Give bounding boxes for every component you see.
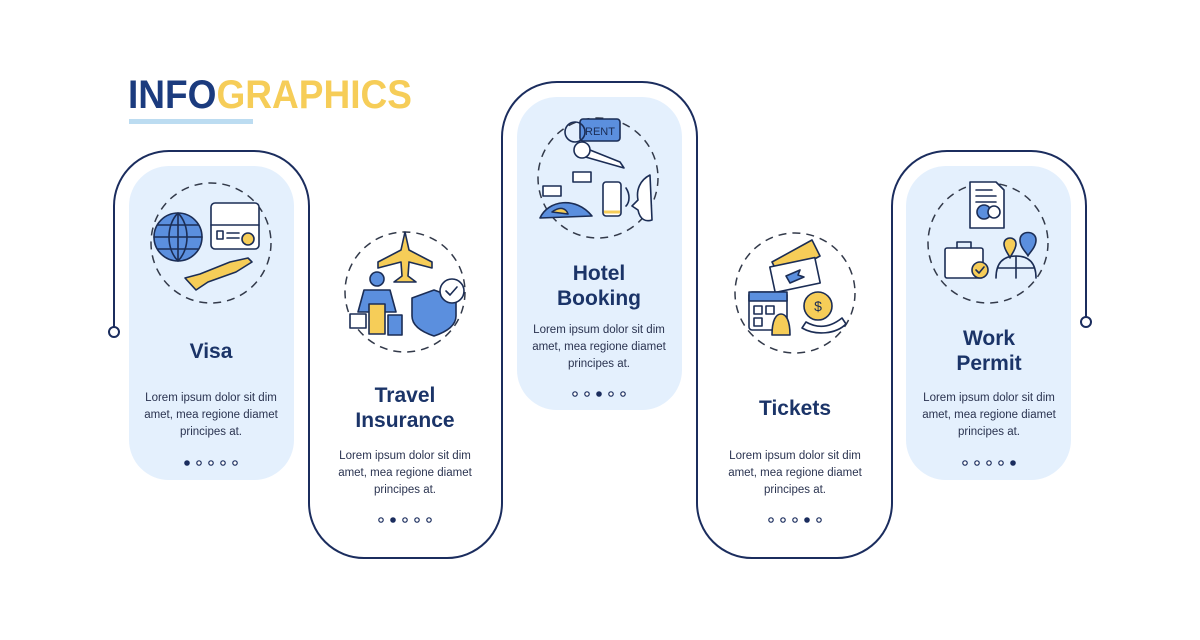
icon: hotel booking: [538, 118, 658, 238]
text: tickets: amet, mea regione diamet: [728, 467, 863, 479]
panel: tickets: [728, 233, 863, 522]
icon: work permit: [928, 182, 1048, 303]
text: hotel booking: amet, mea regione diamet: [532, 341, 667, 353]
heading: hotel booking: Hotel: [573, 262, 625, 285]
heading: hotel booking: Booking: [557, 287, 641, 310]
text: visa: amet, mea regione diamet: [144, 409, 279, 421]
heading: tickets: Tickets: [759, 397, 831, 420]
text: visa: Lorem ipsum dolor sit dim: [145, 392, 277, 404]
dots: tickets: [769, 518, 821, 522]
panel: hotel booking: [517, 97, 682, 410]
text: travel insurance: principes at.: [374, 484, 436, 496]
text: travel insurance: Lorem ipsum dolor sit dim: [339, 450, 471, 462]
icon: hotel booking: RENT: [585, 126, 615, 138]
heading: work permit: Work: [963, 327, 1015, 350]
text: hotel booking: Lorem ipsum dolor sit dim: [533, 324, 665, 336]
title: INFOGRAPHICS: [128, 73, 412, 117]
panel: visa: [129, 166, 294, 480]
text: work permit: Lorem ipsum dolor sit dim: [923, 392, 1055, 404]
panel: travel insurance: [338, 232, 473, 522]
heading: work permit: Permit: [956, 352, 1022, 375]
icon: tickets: [735, 233, 855, 353]
text: visa: principes at.: [180, 426, 242, 438]
text: tickets: principes at.: [764, 484, 826, 496]
heading: visa: Visa: [190, 340, 233, 363]
dots: travel insurance: [379, 518, 431, 522]
text: travel insurance: amet, mea regione diamet: [338, 467, 473, 479]
icon: tickets: $: [814, 298, 822, 314]
dots: hotel booking: [573, 392, 625, 396]
dots: work permit: [963, 461, 1015, 465]
text: work permit: amet, mea regione diamet: [922, 409, 1057, 421]
icon: travel insurance: [345, 232, 465, 352]
text: hotel booking: principes at.: [568, 358, 630, 370]
text: tickets: Lorem ipsum dolor sit dim: [729, 450, 861, 462]
text: work permit: principes at.: [958, 426, 1020, 438]
icon: visa: [151, 183, 271, 303]
dots: visa: [185, 461, 237, 465]
heading: travel insurance: Insurance: [355, 409, 455, 432]
panel: work permit: [906, 166, 1071, 480]
connector line: [109, 82, 1091, 558]
heading: travel insurance: Travel: [375, 384, 435, 407]
